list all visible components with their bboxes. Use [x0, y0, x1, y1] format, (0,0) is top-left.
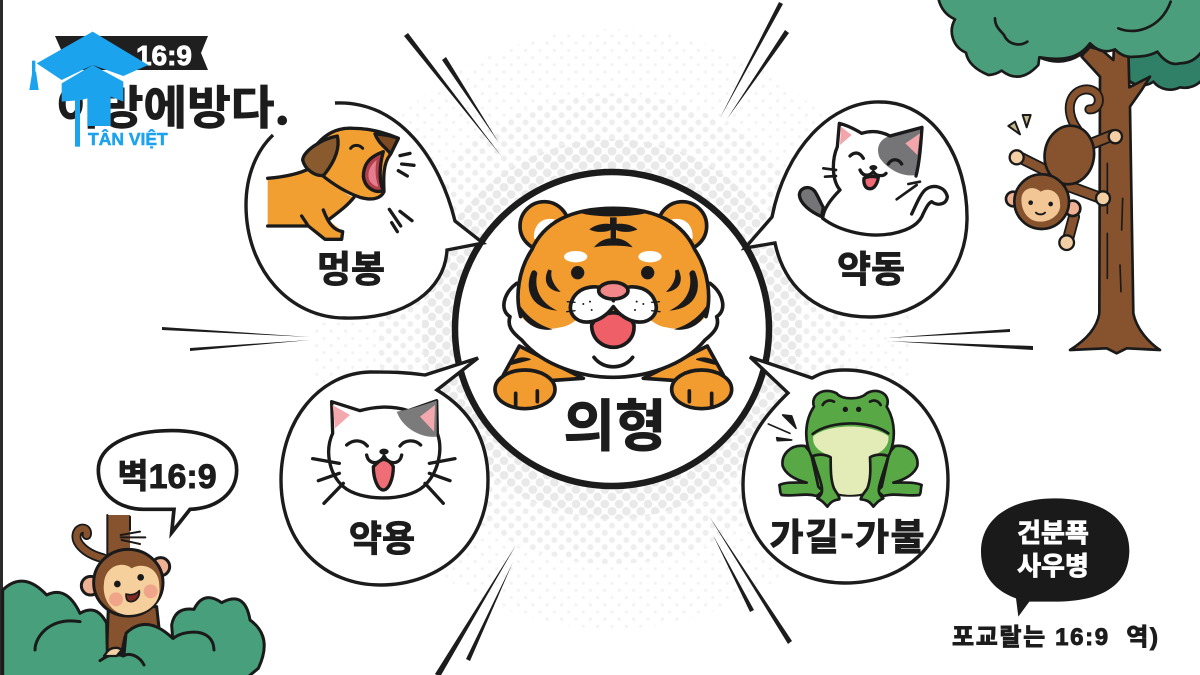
tiger shoulders	[503, 346, 723, 383]
dog illustration	[268, 128, 414, 239]
cat body fill	[823, 123, 947, 235]
monkey tail	[1070, 89, 1099, 129]
dog ear	[303, 136, 338, 175]
cat face	[823, 153, 920, 199]
label: dog: 멍봉	[317, 239, 385, 293]
central circle	[455, 172, 769, 486]
foliage	[938, 0, 1200, 77]
cat patch	[878, 127, 922, 175]
speech bubble: aspect ratio	[98, 431, 237, 533]
logo: Tan Viet: TÂN VIỆT	[88, 128, 168, 149]
dog snout	[375, 134, 398, 154]
bubble: frog	[743, 357, 948, 583]
label: cat top right: 약동	[837, 239, 905, 293]
speech bubble: aspect ratio: 벽16:9	[117, 458, 217, 496]
left edge strip	[0, 0, 3, 675]
caption: 포교랄는 16:9 역)	[952, 624, 1158, 651]
tiger ears	[520, 202, 707, 250]
title banner: 16:9	[136, 40, 192, 71]
dog mouth	[363, 152, 383, 191]
bark lines	[389, 153, 414, 232]
dog head	[315, 128, 398, 199]
bottom left monkey scene	[3, 515, 264, 675]
cat bottom left illustration	[313, 401, 455, 503]
black speech bubble: 건분푝	[1017, 513, 1089, 550]
tiger head	[518, 208, 709, 330]
frog illustration	[768, 391, 922, 507]
emphasis rays	[162, 2, 1033, 675]
monkey head	[81, 549, 170, 616]
cat tongue	[373, 459, 393, 490]
bubble: cat top right	[745, 102, 967, 317]
tree stub	[107, 515, 145, 560]
cat outlines	[823, 123, 947, 235]
cat face	[313, 441, 455, 503]
frog motion marks	[768, 415, 796, 441]
cat tongue	[864, 176, 878, 189]
cat nose	[379, 449, 389, 455]
dog eye	[351, 145, 363, 148]
label: tiger: 의형	[563, 382, 667, 463]
frog belly	[813, 426, 889, 495]
black speech bubble: 사우병	[1017, 546, 1089, 583]
monkey limbs	[1018, 135, 1113, 242]
cat tail gray	[799, 188, 823, 217]
tree trunk	[1070, 47, 1160, 353]
tiger illustration	[495, 202, 732, 409]
label: cat bottom left: 약용	[349, 510, 415, 562]
cat top right illustration	[799, 123, 947, 235]
title banner	[55, 36, 208, 71]
tiger smile	[594, 357, 633, 367]
tiger muzzle	[567, 282, 660, 322]
bubble: cat bottom left	[281, 358, 488, 585]
monkey head	[1006, 174, 1080, 229]
frog back legs	[779, 446, 922, 496]
back foliage	[1120, 50, 1200, 90]
dog body	[268, 168, 354, 239]
bushes	[3, 581, 264, 675]
surprise marks	[1008, 115, 1031, 134]
bark lines	[1107, 163, 1123, 292]
monkey tail	[76, 529, 103, 558]
monkey body and arm	[107, 607, 160, 653]
tree with monkey	[938, 0, 1200, 353]
cat ears	[840, 127, 920, 155]
logo: Tan Viet	[29, 32, 168, 149]
halftone background	[312, 29, 912, 629]
tiger paws	[495, 370, 732, 409]
label: frog: 가길-가불	[770, 507, 924, 561]
frog face	[823, 401, 881, 411]
frog body	[806, 391, 894, 495]
bubble: dog	[246, 103, 483, 318]
tiger white ruff	[504, 283, 723, 377]
title: 이방에방다.	[56, 72, 290, 138]
tiger tongue	[592, 313, 634, 347]
monkey hands	[1010, 130, 1122, 250]
cat nose	[869, 165, 877, 170]
monkey body	[1041, 123, 1098, 187]
black speech bubble	[981, 498, 1129, 617]
cat head	[329, 401, 440, 498]
frog front legs	[813, 455, 888, 507]
cat patch	[397, 401, 437, 437]
cat ears	[333, 405, 435, 432]
frog mouth	[813, 423, 888, 434]
